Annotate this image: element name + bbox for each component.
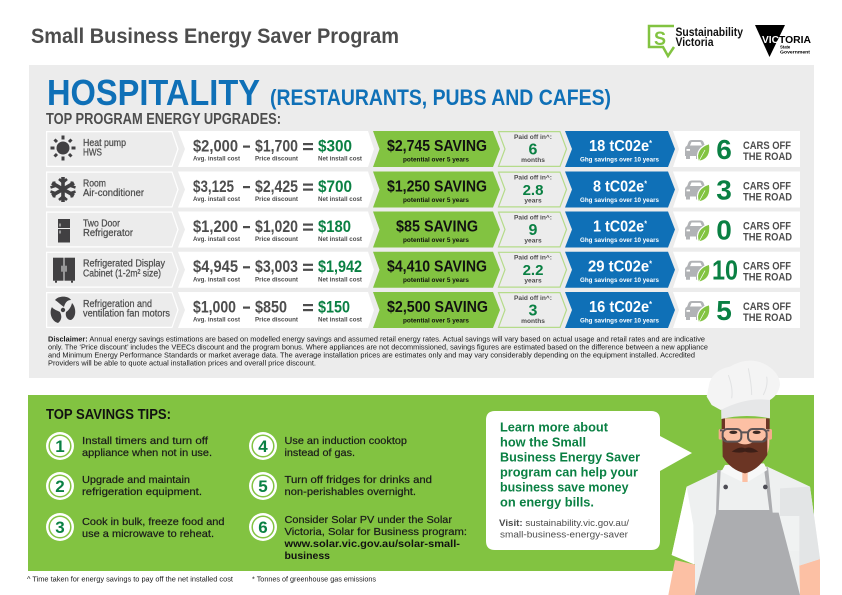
heading: restaurants, pubs and cafes: (RESTAURANTS, PUBS AND CAFES) bbox=[270, 85, 611, 110]
label: Heat pump bbox=[83, 138, 126, 149]
disclaimer: Disclaimer: Annual energy savings estimations are based on modelled energy savings and assumed retail energy rates. Actual savings will vary based on actual usage and retail rates and are indicative bbox=[48, 334, 705, 344]
saving bbox=[387, 299, 488, 324]
saving: $4,410 SAVING bbox=[387, 259, 487, 276]
callout: learn more speech bubble: program can help your bbox=[500, 465, 638, 480]
callout: learn more speech bubble bbox=[486, 411, 692, 550]
tip 1: appliance when not in use. bbox=[82, 447, 212, 459]
row: refrigerated display cabinet bbox=[47, 252, 800, 288]
title: Small Business Energy Saver Program bbox=[31, 25, 399, 48]
install cost equation: $2,000 bbox=[193, 136, 238, 156]
emissions: * bbox=[644, 180, 648, 188]
install cost equation bbox=[193, 298, 363, 324]
saving bbox=[387, 138, 487, 164]
logo: Victoria State Government: Government bbox=[780, 50, 811, 54]
tip 2: 2 bbox=[55, 477, 65, 496]
install cost equation: $3,003 bbox=[255, 257, 298, 276]
install cost equation: Price discount bbox=[255, 156, 299, 163]
tip 6: Consider Solar PV under the Solar bbox=[284, 514, 453, 526]
install cost equation bbox=[193, 257, 363, 283]
footnote: time taken: ^ Time taken for energy savings to pay off the net installed cost bbox=[27, 576, 233, 584]
saving: $1,250 SAVING bbox=[387, 178, 487, 196]
arms bbox=[668, 560, 697, 595]
tip 1: Install timers and turn off bbox=[82, 435, 208, 447]
install cost equation: $1,700 bbox=[255, 136, 298, 156]
payback: 9 bbox=[529, 222, 538, 239]
cars off the road: 0 bbox=[716, 214, 732, 246]
saving bbox=[387, 259, 487, 284]
install cost equation: $3,125 bbox=[193, 177, 234, 196]
label bbox=[83, 299, 170, 320]
install cost equation: $180 bbox=[318, 217, 351, 236]
label bbox=[83, 259, 165, 279]
callout: learn more speech bubble: small-business-energy-saver bbox=[500, 530, 628, 540]
emissions: 29 tC02e bbox=[588, 259, 654, 276]
payback bbox=[514, 214, 552, 244]
install cost equation: Net install cost bbox=[318, 317, 363, 324]
saving: $85 SAVING bbox=[396, 218, 478, 236]
cars off the road: CARS OFF bbox=[743, 220, 791, 232]
cars off the road bbox=[716, 295, 792, 326]
emissions: Ghg savings over 10 years bbox=[580, 197, 659, 204]
install cost equation: $300 bbox=[318, 136, 352, 156]
label: Refrigerator bbox=[83, 228, 134, 239]
tip 4: 4 bbox=[258, 437, 268, 456]
emissions bbox=[580, 218, 659, 244]
install cost equation: Price discount bbox=[255, 317, 299, 324]
install cost equation: $2,425 bbox=[255, 177, 298, 196]
emissions: * bbox=[649, 139, 653, 148]
payback: Paid off in^: bbox=[514, 294, 552, 302]
install cost equation: Avg. install cost bbox=[193, 236, 241, 243]
payback bbox=[514, 254, 552, 285]
payback: years bbox=[524, 198, 542, 204]
cars off the road: 6 bbox=[716, 134, 732, 165]
install cost equation: $150 bbox=[318, 298, 350, 316]
install cost equation: Avg. install cost bbox=[193, 317, 241, 324]
callout: learn more speech bubble: how the Small bbox=[500, 435, 586, 450]
tip 5: non-perishables overnight. bbox=[284, 486, 416, 498]
cars off the road: 10 bbox=[712, 255, 738, 286]
emissions: Ghg savings over 10 years bbox=[580, 277, 659, 284]
emissions: * bbox=[649, 300, 653, 309]
logo: Victoria State Government: VIC bbox=[762, 35, 779, 46]
emissions bbox=[580, 259, 659, 284]
install cost equation: Price discount bbox=[255, 196, 299, 203]
payback: years bbox=[524, 278, 542, 285]
emissions: * bbox=[644, 220, 648, 228]
hair and beard bbox=[722, 418, 770, 429]
disclaimer bbox=[48, 334, 708, 368]
tip 6 bbox=[249, 513, 467, 562]
label: HWS bbox=[83, 148, 102, 159]
payback: Paid off in^: bbox=[514, 174, 552, 182]
saving: potential over 5 years bbox=[403, 318, 469, 324]
install cost equation bbox=[193, 217, 363, 243]
logo: Sustainability Victoria bbox=[649, 25, 743, 56]
saving: $2,745 SAVING bbox=[387, 138, 487, 155]
callout: learn more speech bubble: Business Energy Saver bbox=[500, 450, 640, 465]
tip 2: Upgrade and maintain bbox=[82, 474, 190, 486]
icon: sun bbox=[50, 136, 76, 160]
cars off the road: THE ROAD bbox=[743, 151, 792, 163]
footnote: tonnes: * Tonnes of greenhouse gas emissions bbox=[252, 576, 377, 584]
saving: potential over 5 years bbox=[403, 197, 469, 204]
logo: Sustainability Victoria: S bbox=[654, 29, 666, 50]
tip 4 bbox=[249, 432, 407, 460]
cars off the road: THE ROAD bbox=[743, 312, 792, 324]
install cost equation: Net install cost bbox=[318, 276, 363, 283]
apron bbox=[695, 467, 800, 595]
install cost equation: Net install cost bbox=[318, 236, 363, 243]
payback bbox=[514, 174, 552, 204]
logo: Sustainability Victoria: Sustainability bbox=[676, 25, 743, 39]
install cost equation: Price discount bbox=[255, 236, 299, 243]
panel: top savings tips bbox=[28, 395, 814, 571]
row: refrigeration and ventilation fan motors bbox=[47, 292, 800, 328]
collar bbox=[721, 463, 767, 482]
install cost equation: Price discount bbox=[255, 276, 299, 283]
payback: 2.2 bbox=[523, 262, 543, 279]
cars off the road bbox=[716, 214, 792, 246]
row: two door refrigerator bbox=[47, 212, 800, 248]
callout: learn more speech bubble: Visit: sustainability.vic.gov.au/ bbox=[499, 518, 630, 528]
payback: 2.8 bbox=[523, 182, 543, 199]
install cost equation bbox=[193, 136, 363, 163]
emissions bbox=[580, 299, 659, 324]
emissions bbox=[580, 178, 659, 204]
cars off the road bbox=[716, 174, 792, 206]
tip 2 bbox=[46, 472, 202, 500]
emissions: Ghg savings over 10 years bbox=[580, 156, 659, 164]
payback: Paid off in^: bbox=[514, 214, 552, 222]
callout: learn more speech bubble: business save money bbox=[500, 480, 629, 495]
install cost equation: $1,942 bbox=[318, 257, 362, 276]
tip 3: use a microwave to reheat. bbox=[82, 528, 214, 540]
install cost equation: $850 bbox=[255, 298, 287, 316]
payback: 3 bbox=[529, 302, 538, 320]
tip 5: Turn off fridges for drinks and bbox=[284, 474, 432, 486]
label: Air-conditioner bbox=[83, 188, 145, 199]
emissions bbox=[580, 138, 659, 164]
icon: snowflake bbox=[50, 177, 76, 202]
cars off the road: CARS OFF bbox=[743, 140, 791, 152]
label bbox=[83, 138, 126, 159]
payback: years bbox=[524, 238, 542, 244]
payback: Paid off in^: bbox=[514, 254, 552, 262]
emissions: * bbox=[649, 260, 653, 269]
neck bbox=[742, 472, 748, 482]
saving: $2,500 SAVING bbox=[387, 299, 488, 316]
tip 6: business bbox=[284, 550, 330, 562]
row: room air-conditioner bbox=[47, 172, 800, 208]
emissions: Ghg savings over 10 years bbox=[580, 237, 659, 244]
cars off the road: THE ROAD bbox=[743, 272, 792, 284]
install cost equation: Avg. install cost bbox=[193, 156, 241, 163]
jacket bbox=[672, 467, 820, 595]
tip 2: refrigeration equipment. bbox=[82, 486, 202, 498]
install cost equation: $700 bbox=[318, 177, 352, 196]
callout: learn more speech bubble: Learn more about bbox=[500, 420, 609, 435]
install cost equation: Net install cost bbox=[318, 196, 363, 203]
saving: potential over 5 years bbox=[403, 277, 469, 284]
saving bbox=[387, 178, 487, 204]
install cost equation bbox=[193, 177, 363, 203]
saving: potential over 5 years bbox=[403, 156, 469, 164]
heading: TOP SAVINGS TIPS: bbox=[46, 407, 171, 423]
install cost equation: Avg. install cost bbox=[193, 276, 241, 283]
logo: Sustainability Victoria: Victoria bbox=[676, 35, 714, 49]
logo: Victoria State Government: State bbox=[780, 44, 791, 50]
tip 6: www.solar.vic.gov.au/solar-small- bbox=[283, 538, 461, 550]
cars off the road bbox=[712, 255, 792, 286]
cars off the road: 5 bbox=[716, 295, 732, 326]
label: Room bbox=[83, 178, 106, 190]
face bbox=[722, 418, 769, 468]
label: Refrigerated Display bbox=[83, 259, 165, 270]
label bbox=[83, 178, 145, 199]
cars off the road bbox=[716, 134, 792, 165]
tip 4: instead of gas. bbox=[284, 447, 355, 459]
install cost equation: $1,000 bbox=[193, 298, 236, 316]
cars off the road: CARS OFF bbox=[743, 301, 791, 313]
subheading: TOP PROGRAM ENERGY UPGRADES: bbox=[46, 111, 281, 128]
label: Refrigeration and bbox=[83, 299, 152, 310]
emissions: Ghg savings over 10 years bbox=[580, 318, 659, 324]
tip 4: Use an induction cooktop bbox=[284, 435, 407, 447]
cars off the road: CARS OFF bbox=[743, 180, 791, 192]
tip 1: 1 bbox=[55, 437, 65, 456]
emissions: 1 tC02e bbox=[593, 218, 650, 236]
cars off the road: CARS OFF bbox=[743, 261, 791, 273]
saving: potential over 5 years bbox=[403, 237, 469, 244]
panel: hospitality upgrades bbox=[29, 65, 814, 378]
tip 3 bbox=[46, 513, 225, 541]
icon: display cabinet bbox=[53, 258, 75, 283]
disclaimer: Providers will be able to quote actual installation prices and overall price discount. bbox=[48, 358, 316, 368]
disclaimer: and Minimum Energy Performance Standards or market average data. The average installation prices are estimates only and may vary considerably depending on the equipment installed. Accredited bbox=[48, 350, 695, 360]
install cost equation: $1,200 bbox=[193, 217, 238, 236]
label bbox=[83, 218, 134, 239]
install cost equation: Avg. install cost bbox=[193, 196, 241, 203]
install cost equation: Net install cost bbox=[318, 156, 363, 163]
tip 3: 3 bbox=[55, 518, 65, 537]
disclaimer: only. The ‘Price discount’ includes the VEECs discount and the program bonus. Where appliances are not decommissioned, savings figures are estimated based on the difference between a new appliance bbox=[48, 342, 708, 352]
label: Two Door bbox=[83, 218, 121, 230]
payback: months bbox=[521, 318, 545, 325]
tip 5 bbox=[249, 472, 432, 500]
payback: months bbox=[521, 157, 545, 164]
row: heat pump HWS bbox=[47, 131, 800, 167]
cars off the road: THE ROAD bbox=[743, 232, 792, 244]
install cost equation: $1,020 bbox=[255, 217, 298, 236]
callout: learn more speech bubble: on energy bills. bbox=[500, 495, 594, 510]
icon: fan bbox=[51, 297, 75, 323]
glasses bbox=[720, 429, 769, 442]
illustration: chef bbox=[668, 361, 820, 595]
payback: 6 bbox=[529, 142, 538, 158]
tip 1 bbox=[46, 432, 212, 460]
cars off the road: 3 bbox=[716, 174, 732, 206]
tip 6: 6 bbox=[258, 518, 268, 537]
payback bbox=[514, 133, 552, 164]
saving bbox=[396, 218, 478, 244]
emissions: 8 tC02e bbox=[593, 178, 650, 196]
tip 5: 5 bbox=[258, 477, 268, 496]
payback bbox=[514, 294, 552, 325]
cars off the road: THE ROAD bbox=[743, 192, 792, 204]
emissions: 16 tC02e bbox=[589, 299, 655, 316]
tip 6: Victoria, Solar for Business program: bbox=[284, 526, 467, 538]
hat bbox=[721, 398, 770, 419]
heading: hospitality: HOSPITALITY bbox=[47, 72, 260, 113]
tip 3: Cook in bulk, freeze food and bbox=[82, 516, 225, 528]
payback: Paid off in^: bbox=[514, 133, 552, 141]
label: Cabinet (1-2m² size) bbox=[83, 268, 161, 279]
icon: fridge bbox=[58, 219, 70, 242]
label: ventilation fan motors bbox=[83, 309, 170, 320]
logo: Victoria State Government bbox=[755, 25, 811, 57]
emissions: 18 tC02e bbox=[589, 138, 655, 155]
install cost equation: $4,945 bbox=[193, 257, 238, 276]
logo: Victoria State Government: TORIA bbox=[779, 35, 811, 46]
